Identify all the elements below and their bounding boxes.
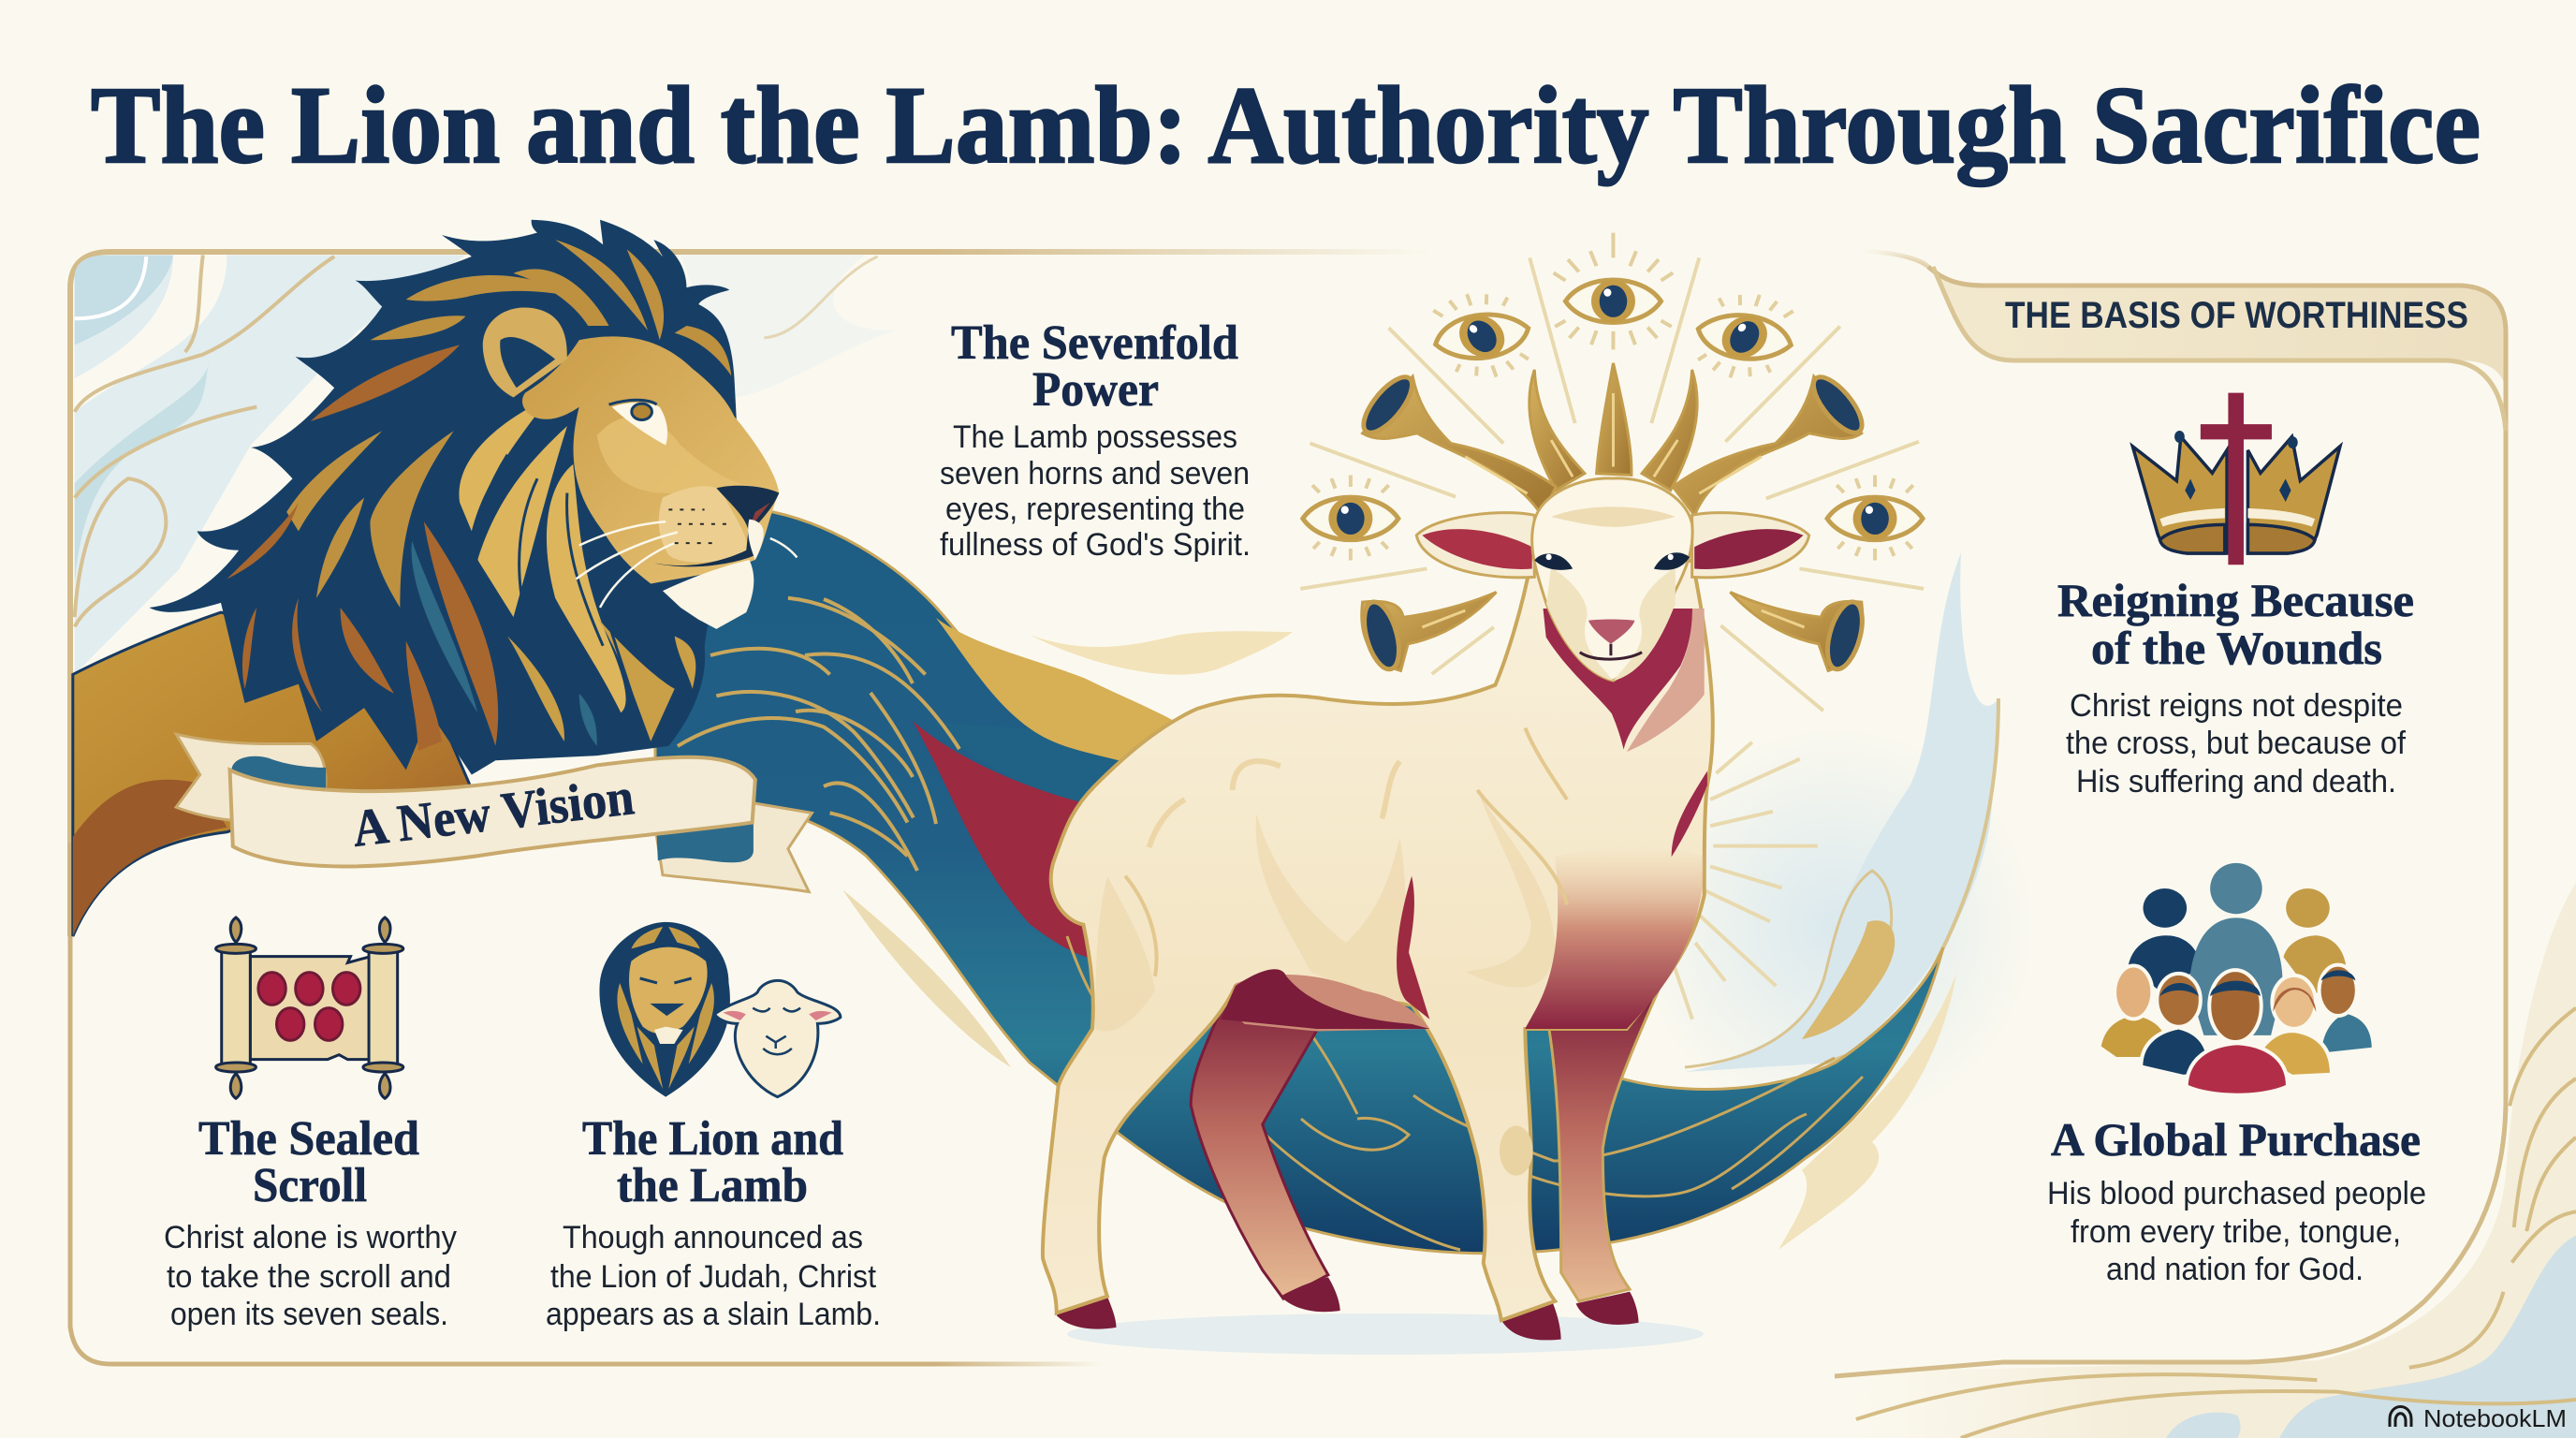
body [2066,688,2407,800]
body: the cross, but because of [2066,726,2407,761]
lion head [522,336,779,583]
body [164,1220,457,1332]
lion beard [663,560,754,629]
icon: lion and lamb heads [599,922,841,1097]
body: Christ alone is worthy [164,1220,457,1255]
crimson stripe of banner [913,721,1123,960]
far hind leg [1191,981,1328,1299]
panel frame: the basis of worthiness [1835,251,2506,1376]
heading: A Global Purchase [2051,1113,2421,1166]
lower-right decorative waves [1856,883,2576,1438]
body shading [1095,790,1555,1032]
hooves [1057,1277,1639,1340]
icon: group of people [2100,863,2374,1095]
block: the lion and the lamb [546,922,881,1332]
body: His blood purchased people [2047,1176,2426,1211]
mane navy hair lines [476,455,638,717]
sunburst behind the lamb's chest [1675,742,1818,1020]
pale gold wisps [842,631,1293,1067]
lamb body [1043,561,1713,1340]
lion body [73,612,472,936]
panel frame: a new vision [70,252,1432,1364]
sky background behind the lion [75,255,896,674]
ground shadow [1067,1313,1704,1355]
body: to take the scroll and [167,1259,451,1295]
lion mane [149,220,738,775]
heading: of the Wounds [2091,622,2382,674]
ribbon: a new vision [176,734,812,892]
heading [198,1112,419,1212]
flowing blue banner from lion to lamb [655,510,1943,1254]
main body [1043,561,1713,1320]
far front leg [1549,981,1662,1301]
horns [1362,363,1863,670]
lion ear [483,308,567,397]
body [546,1220,881,1332]
body: the Lion of Judah, Christ [550,1259,877,1295]
title: The Lion and the Lamb: Authority Through Sacrifice [91,64,2481,186]
lion eye [612,403,667,446]
block: the sevenfold power [940,316,1251,563]
body: Though announced as [563,1220,863,1255]
lamb face [1534,552,1690,570]
block: the sealed scroll [164,917,457,1332]
heading: The Sevenfold [951,316,1238,370]
seals [258,973,360,1040]
heading: The Sealed [198,1112,419,1166]
pale blue swirl to the right of the lamb [1629,552,2041,1250]
band label: THE BASIS OF WORTHINESS [2005,295,2468,336]
horn bells [1354,373,1871,671]
body: eyes, representing the [945,492,1245,527]
ribbon label: A New Vision [349,768,637,858]
body [940,419,1251,563]
body: seven horns and seven [940,456,1250,492]
body: fullness of God's Spirit. [940,527,1251,563]
notebooklm watermark: NotebookLM [2423,1404,2567,1432]
block: a global purchase [2047,863,2426,1287]
heading: The Lion and [582,1112,843,1166]
icon: crown and cross [2132,393,2340,565]
lamb head with horns and eyes [1303,233,1923,681]
body: open its seven seals. [170,1297,448,1332]
lion [73,220,926,936]
heading: Reigning Because [2057,574,2414,626]
lion back strokes [678,598,926,856]
block: reigning because of the wounds [2057,393,2414,800]
long rays around the lamb's head [1300,257,1924,711]
icon: scroll [216,917,403,1098]
ears [1416,513,1534,578]
belly shading [1231,975,1429,1032]
gold tail of banner [936,618,1193,782]
lion whiskers [576,521,797,608]
body: The Lamb possesses [953,419,1237,455]
head [1532,478,1692,681]
body [2047,1176,2426,1287]
lion mane strands [286,240,731,694]
heading [2057,574,2414,674]
body: from every tribe, tongue, [2071,1214,2401,1250]
neck crimson [1627,609,1705,752]
seven eyes [1303,233,1923,561]
heading [582,1112,843,1212]
heading [951,316,1238,417]
body: His suffering and death. [2076,764,2396,800]
body: Christ reigns not despite [2070,688,2403,724]
heading: the Lamb [617,1159,808,1212]
lion nose and mouth [716,486,779,534]
heading: Scroll [253,1159,367,1212]
body: appears as a slain Lamb. [546,1297,881,1332]
heading: Power [1032,363,1159,417]
chest shading [1525,846,1705,1029]
knee patch [1500,1126,1533,1176]
body: and nation for God. [2106,1252,2364,1287]
